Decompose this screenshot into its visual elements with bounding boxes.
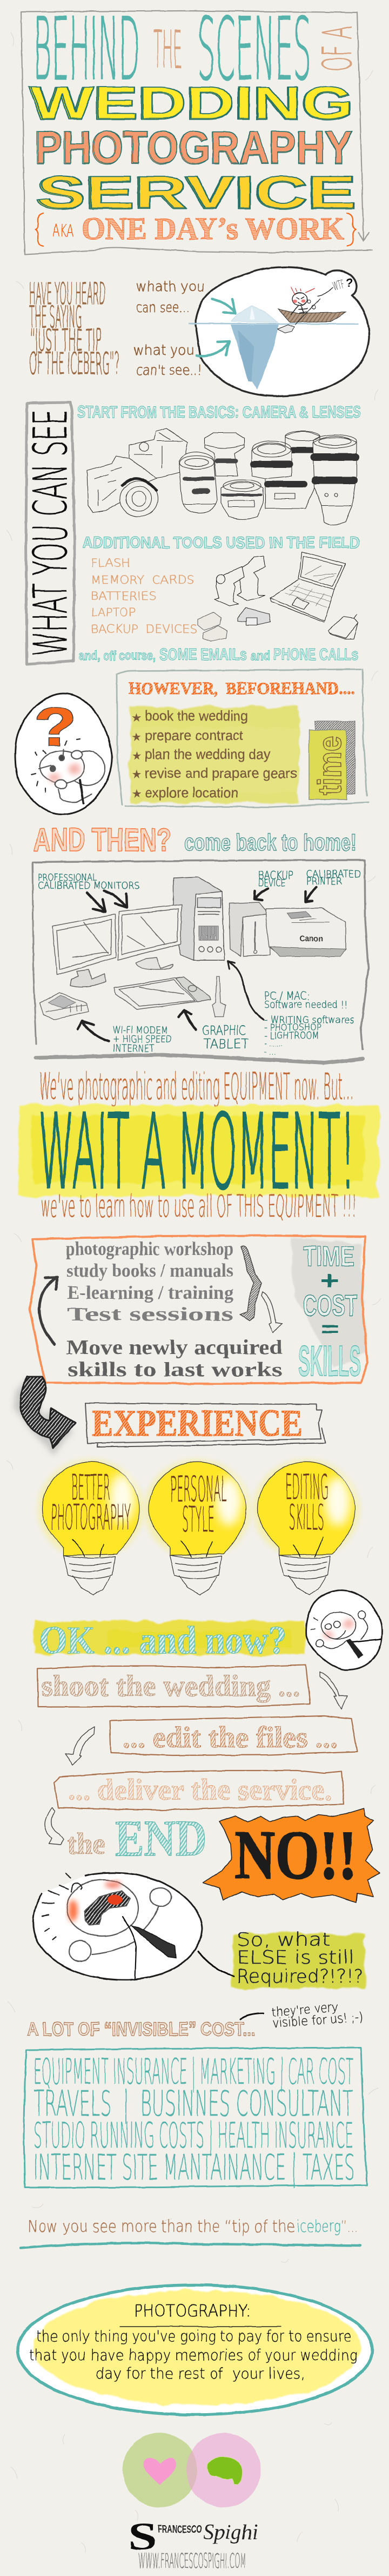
- software notes: - ...: [264, 1047, 276, 1058]
- tip of the iceberg line: Now you see more than the “tip of the: [28, 2217, 295, 2236]
- checklist: ★: [132, 712, 142, 724]
- wait a moment banner: [18, 1093, 378, 1212]
- tools list: BACKUP DEVICES: [91, 623, 197, 636]
- wifi and tablet labels: TABLET: [203, 1036, 249, 1052]
- and then heading: AND THEN?: [33, 822, 171, 858]
- email and phone line: and: [251, 649, 270, 663]
- email and phone line: [79, 645, 358, 664]
- arrow: deliver to end: [45, 1808, 64, 1845]
- flash units: [237, 556, 265, 600]
- icon: brain: [207, 2457, 242, 2485]
- rear ring lens: [265, 432, 320, 508]
- text: PHOTOGRAPHY: [51, 1498, 131, 1538]
- illustration: cameras and lenses: [87, 428, 357, 525]
- stick man: [291, 287, 333, 325]
- monitors: [52, 904, 182, 987]
- software notes: - LIGHTROOM: [264, 1031, 319, 1041]
- no burst: NO!!: [234, 1817, 357, 1893]
- iceberg side labels: [133, 279, 205, 379]
- tools list: FLASH: [91, 557, 130, 570]
- arrow to router: [78, 1021, 109, 1041]
- time tag: time: [312, 736, 348, 795]
- title word: service: [36, 167, 356, 218]
- illustration: field tools: [198, 552, 358, 641]
- checklist: prepare contract: [145, 727, 244, 743]
- monitor labels: BACKUP: [258, 869, 293, 882]
- tip of the iceberg line: iceberg: [297, 2217, 341, 2236]
- thought bubble: [196, 267, 369, 396]
- home equipment panel: [32, 860, 368, 1063]
- arrow: what you can see: [212, 299, 236, 313]
- monitor labels: PRINTER: [306, 876, 342, 887]
- batteries: [198, 612, 222, 630]
- aside: very visible: they're very: [271, 2000, 339, 2020]
- checklist: ★: [132, 788, 142, 800]
- title word: photography: PHOTOGRAPHY: [35, 122, 352, 173]
- bulb: personal style: STYLE: [182, 1500, 214, 1540]
- beforehand panel: [117, 669, 368, 807]
- monitor labels: DEVICE: [258, 877, 285, 889]
- panel frame: [117, 669, 368, 807]
- backup drive: [328, 615, 358, 639]
- repeat arrow: [39, 1277, 58, 1345]
- software notes: - PHOTOSHOP: [264, 1022, 321, 1033]
- character: [31, 739, 105, 803]
- software notes: - .......: [264, 1038, 283, 1049]
- step: shoot the wedding: shoot the wedding ...: [41, 1669, 300, 1702]
- title word: wedding: [30, 77, 353, 129]
- title word: wedding: WEDDING: [31, 77, 353, 128]
- tools list: BATTERIES: [91, 590, 157, 603]
- banner frame: [85, 1403, 325, 1447]
- bubble: [15, 693, 112, 814]
- speech: what else: So, what: [237, 1929, 330, 1951]
- hood lens: [205, 433, 244, 476]
- shadow hatch: [292, 1239, 367, 1369]
- learning list: [66, 1238, 283, 1381]
- graphic tablet: [114, 977, 211, 1009]
- orange frame: [30, 1236, 367, 1384]
- text: “JUST THE TIP: [30, 323, 102, 358]
- question mark: ?: [35, 697, 77, 757]
- monitor labels: PROFESSIONAL: [38, 872, 97, 883]
- wifi and tablet labels: [113, 1023, 249, 1054]
- email and phone line: PHONE CALLs: [273, 645, 358, 664]
- printer: [266, 908, 346, 956]
- wifi router: [39, 993, 88, 1020]
- equation: TIME: [303, 1241, 354, 1272]
- title word: photography: PHOTOGRAPHY: [36, 122, 352, 173]
- aside: very visible: visible for us! ;-): [272, 2010, 364, 2031]
- the end label: the: [67, 1827, 105, 1860]
- iceberg underwater: [231, 325, 279, 389]
- boat: [278, 309, 346, 322]
- iceberg illustration: ?: [346, 276, 353, 289]
- iceberg side labels: what you: [133, 342, 194, 359]
- subtitle: aka one day's work: ONE DAY’s WORK: [82, 211, 344, 246]
- arrow: edit to deliver: [65, 1727, 95, 1765]
- tools list: [91, 557, 197, 636]
- monitor labels: CALIBRATED: [306, 868, 361, 880]
- heading: HOWEVER, BEFOREHAND....: [129, 678, 355, 698]
- monitor labels: [38, 868, 361, 891]
- banner text: EXPERIENCE: [92, 1403, 303, 1444]
- title line: behind the scenes of a: THE: [153, 21, 182, 80]
- computer tower: [173, 877, 224, 960]
- title panel frame: [21, 11, 372, 254]
- face and limbs: [42, 1873, 171, 1961]
- experience banner: [85, 1403, 325, 1447]
- printer: Canon: [299, 934, 323, 943]
- learning list: Test sessions: [67, 1303, 233, 1325]
- yellow wash: [130, 706, 299, 803]
- backup device: [229, 902, 270, 956]
- front camera: [87, 456, 157, 512]
- arrow: shoot to edit: [320, 1672, 347, 1709]
- iceberg question text: [29, 276, 119, 381]
- software notes: PC / MAC:: [264, 989, 310, 1002]
- bulb: editing skills: [253, 1459, 359, 1595]
- text: OF THE ICEBERG”?: [29, 346, 119, 381]
- brace: [240, 1246, 261, 1320]
- monitor labels: CALIBRATED MONITORS: [38, 880, 139, 891]
- back camera: [129, 428, 187, 481]
- confused character bubble: [15, 693, 112, 814]
- title word: service: SERVICE: [36, 167, 356, 218]
- tie and body line: [123, 1917, 136, 1978]
- photography definition oval: that you have happy memories of your wedding: [29, 2346, 358, 2364]
- learning list: photographic workshop: [66, 1238, 233, 1259]
- software notes: Software needed !!: [264, 999, 347, 1010]
- telephoto lens: [313, 436, 357, 525]
- water line: [189, 323, 358, 324]
- cost list panel: [24, 2047, 367, 2188]
- wifi and tablet labels: WI-FI MODEM: [113, 1025, 167, 1036]
- iceberg side labels: can't see..!: [136, 362, 202, 379]
- step: deliver the service: ... deliver the service.: [68, 1773, 332, 1806]
- photography definition oval: the only thing you've going to pay for to ensure: [36, 2327, 351, 2345]
- title: [30, 0, 361, 246]
- wifi and tablet labels: GRAPHIC: [202, 1023, 246, 1038]
- what you can see panel frame: [26, 402, 75, 664]
- learning list: E-learning / training: [67, 1282, 233, 1303]
- tools list: LAPTOP: [91, 606, 136, 619]
- checklist: book the wedding: [145, 708, 248, 724]
- time tag: [309, 721, 355, 800]
- no burst: [203, 1808, 379, 1903]
- text: HAVE YOU HEARD: [29, 276, 105, 311]
- learning list: Move newly acquired: [66, 1336, 283, 1359]
- large ring lens: [252, 442, 292, 479]
- the end label: [67, 1811, 207, 1867]
- arrow to computer: [228, 961, 264, 1020]
- arrow to tablet: [179, 1010, 196, 1029]
- equation: [298, 1241, 361, 1385]
- photography definition oval: PHOTOGRAPHY:: [134, 2302, 251, 2321]
- title word: service: SERVICE: [37, 167, 356, 217]
- bubble: [33, 1873, 202, 1980]
- software notes: - WRITING softwares: [264, 1015, 354, 1026]
- icon: heart: [143, 2458, 176, 2485]
- text: PERSONAL: [170, 1470, 227, 1510]
- author logo: FRANCESCO: [158, 2524, 202, 2535]
- iceberg top: [231, 306, 278, 322]
- bulb: better photography: BETTER: [71, 1468, 110, 1508]
- checklist: ★: [132, 750, 142, 762]
- rotated heading: what you can see: WHAT YOU CAN SEE: [24, 409, 78, 656]
- speech: what else: ELSE is still: [237, 1947, 354, 1969]
- arrow: what you can't see: [197, 341, 230, 356]
- camera lens: [120, 481, 158, 517]
- email and phone line: SOME EMAILs: [159, 645, 247, 664]
- arrows to hardware: [87, 887, 316, 911]
- memory cards: [238, 608, 270, 625]
- the end label: END: [115, 1811, 207, 1867]
- small front lens: [179, 452, 217, 513]
- tools list: MEMORY CARDS: [91, 573, 194, 586]
- iceberg side labels: can see...: [136, 300, 190, 316]
- wifi and tablet labels: INTERNET: [113, 1043, 155, 1054]
- arrow to equation: [261, 1292, 282, 1332]
- happy character bubble: [306, 1590, 382, 1670]
- learning list: skills to last works: [68, 1358, 283, 1381]
- iceberg question text: THE SAYING: [29, 300, 82, 334]
- bulb: personal style: [145, 1459, 251, 1595]
- equation: =: [321, 1317, 339, 1341]
- tip of the iceberg line: ”...: [341, 2217, 358, 2236]
- iceberg illustration: [189, 267, 369, 396]
- ok and now heading: OK ... and now?: [39, 1619, 286, 1662]
- equation: +: [320, 1265, 339, 1296]
- speech: what else: [198, 1929, 365, 1988]
- front fast lens: [221, 481, 263, 519]
- and then heading: [33, 822, 357, 858]
- title line: behind the scenes of a: BEHIND: [33, 0, 140, 100]
- equation: COST: [303, 1289, 357, 1322]
- invisible cost heading: A LOT OF “INVISIBLE” COST...: [27, 2019, 256, 2040]
- bulb: better photography: [38, 1459, 144, 1595]
- checklist: revise and prapare gears: [145, 765, 297, 781]
- oar: [278, 325, 294, 333]
- tablet pen: [212, 976, 226, 1017]
- panel frame: [32, 860, 368, 1049]
- checklist: plan the wedding day: [145, 746, 270, 762]
- checklist: ★: [132, 769, 142, 781]
- wtf label: WTF: [331, 278, 346, 294]
- iceberg side labels: whath you: [136, 279, 205, 295]
- speech: what else: Required?!?!?: [237, 1966, 364, 1987]
- checklist: explore location: [145, 784, 238, 801]
- shouting character bubble: [33, 1873, 202, 1980]
- yellow wash: [18, 1105, 378, 1196]
- title word: wedding: WEDDING: [30, 78, 353, 129]
- checklist: ★: [132, 731, 142, 743]
- heart and brain venn diagram: [123, 2433, 261, 2507]
- photography definition oval: [18, 2285, 372, 2415]
- tip of the iceberg line: [21, 2217, 360, 2248]
- wifi and tablet labels: + HIGH SPEED: [113, 1034, 172, 1045]
- learning panel: [30, 1236, 367, 1385]
- checklist: [132, 708, 297, 801]
- aside: very visible: [240, 2000, 364, 2031]
- photography definition oval: day for the rest of your lives,: [96, 2364, 305, 2382]
- author logo: [128, 2515, 258, 2573]
- step: edit the files: ... edit the files ...: [123, 1721, 338, 1754]
- subtitle: aka one day's work: AKA: [52, 221, 74, 241]
- mouth: [84, 1891, 130, 1925]
- email and phone line: and, off course,: [79, 649, 156, 663]
- laptop: [299, 552, 346, 590]
- learning list: study books / manuals: [66, 1260, 233, 1281]
- software notes: [264, 989, 354, 1058]
- author logo: S: [128, 2515, 157, 2558]
- author logo: Spighi: [203, 2520, 258, 2544]
- big curved arrow: [14, 1377, 76, 1455]
